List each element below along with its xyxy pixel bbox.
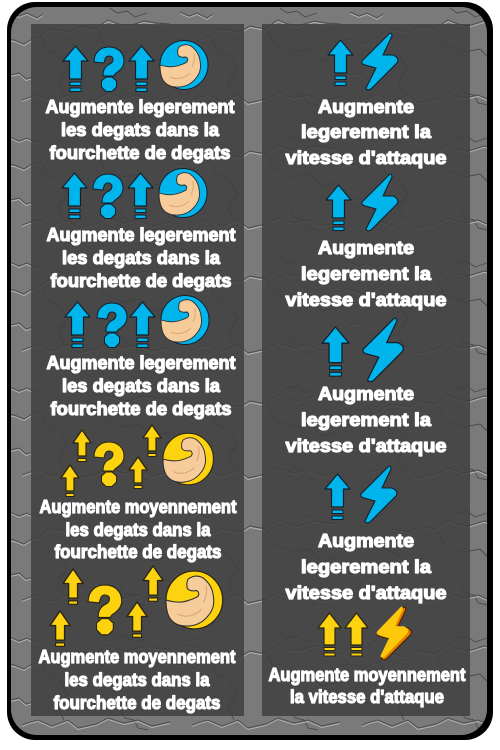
speed 5: yellow icons	[318, 606, 411, 660]
speed 1: blue icons	[328, 33, 398, 90]
effect 5 text: les degats dans la	[64, 670, 210, 690]
effect 4 text: les degats dans la	[66, 520, 211, 540]
effect 5 text	[38, 647, 236, 713]
effect 3 text: les degats dans la	[62, 376, 221, 396]
speed 3 text	[286, 384, 446, 456]
speed 4: blue icons	[325, 466, 397, 523]
speed 1 text	[286, 97, 446, 168]
effect 1 text: les degats dans la	[61, 120, 220, 140]
speed 4 text: Augmente	[318, 531, 414, 551]
speed 2 text: legerement la	[301, 264, 432, 284]
panel: damage effects	[31, 24, 244, 716]
effect 2 text	[46, 225, 236, 291]
speed 3 text: Augmente	[318, 384, 414, 404]
effect 4: yellow damage icons	[61, 425, 213, 496]
effect 1 text: Augmente legerement	[46, 97, 235, 117]
effect 2 text: fourchette de degats	[50, 271, 232, 291]
speed 3 text: legerement la	[301, 410, 432, 430]
speed 5 text: Augmente moyennement	[268, 665, 466, 685]
effect 4 text: Augmente moyennement	[40, 497, 236, 517]
speed 3 text: vitesse d'attaque	[286, 436, 446, 456]
speed 2 text	[286, 238, 446, 310]
speed 2 text: Augmente	[318, 238, 414, 258]
effect 2 text: Augmente legerement	[46, 225, 236, 245]
effect 5 text: Augmente moyennement	[38, 647, 236, 667]
effect 4 text	[40, 497, 236, 562]
panel: attack speed effects	[262, 24, 470, 716]
effect 3 text: Augmente legerement	[46, 353, 236, 373]
speed 3: blue icons	[322, 318, 403, 382]
effect 3 text	[46, 353, 236, 419]
speed 1 text: vitesse d'attaque	[286, 148, 446, 168]
speed 1 text: Augmente	[318, 97, 414, 117]
effect 4 text: fourchette de degats	[54, 542, 222, 562]
speed 2: blue icons	[326, 174, 398, 231]
speed 4 text: legerement la	[301, 557, 432, 577]
effect 1 text: fourchette de degats	[50, 143, 230, 163]
effect 2: blue damage icons	[62, 168, 207, 218]
effect 3: blue damage icons	[65, 296, 209, 348]
effect 1 text	[46, 97, 235, 163]
speed 2 text: vitesse d'attaque	[286, 290, 446, 310]
effect 1: blue damage icons	[63, 40, 208, 92]
speed 4 text: vitesse d'attaque	[286, 583, 446, 603]
speed 5 text	[268, 665, 466, 707]
effect 2 text: les degats dans la	[62, 248, 221, 268]
speed 4 text	[286, 531, 446, 603]
effect 3 text: fourchette de degats	[50, 399, 232, 419]
effect 5: yellow damage icons	[50, 566, 223, 646]
speed 5 text: la vitesse d'attaque	[290, 687, 444, 707]
effect 5 text: fourchette de degats	[54, 693, 220, 713]
speed 1 text: legerement la	[301, 122, 432, 142]
